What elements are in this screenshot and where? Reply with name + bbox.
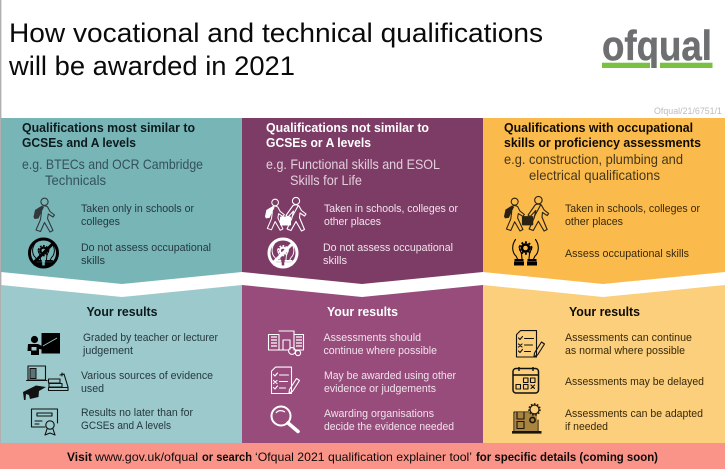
- purple results heading: Your results: [327, 305, 398, 319]
- orange examples: electrical qualifications: [529, 168, 660, 183]
- teal text: where taken: colleges: [81, 216, 120, 228]
- purple heading: GCSEs or A levels: [266, 136, 371, 150]
- purple result: awarding organisations: [324, 408, 454, 433]
- icon: magnifying glass: [272, 406, 298, 432]
- icon: student walking: [34, 198, 54, 232]
- panel: qualifications most similar to GCSEs and A levels: [1, 118, 242, 284]
- title: [8, 18, 543, 81]
- purple text: occupational skills: Do not assess occupational: [323, 242, 453, 254]
- purple result: awarding organisations: Awarding organisations: [324, 408, 434, 420]
- purple result: other evidence: May be awarded using other: [324, 370, 456, 382]
- logo: ofqual: ofqual: [602, 22, 712, 69]
- icon: certificate: [32, 409, 58, 435]
- teal result: results date: GCSEs and A levels: [81, 420, 171, 432]
- teal result: sources of evidence: used: [81, 383, 104, 395]
- purple text: where taken: Taken in schools, colleges or: [324, 203, 458, 215]
- purple text: where taken: [324, 203, 458, 228]
- teal result: results date: [81, 407, 193, 432]
- teal examples: [22, 157, 203, 188]
- purple heading: [266, 121, 429, 150]
- teal text: occupational skills: [81, 242, 211, 267]
- icon: hands holding gear: [513, 240, 538, 266]
- teal text: occupational skills: skills: [81, 255, 105, 267]
- purple result: assessments continue: continue where possible: [324, 345, 437, 357]
- orange heading: skills or proficiency assessments: [504, 136, 701, 150]
- icon: sources of evidence: [23, 366, 68, 400]
- footer text: www.gov.uk/ofqual: [94, 450, 198, 464]
- icon: two people: [265, 197, 306, 231]
- purple result: assessments continue: [324, 332, 437, 357]
- purple upper background: [242, 118, 483, 284]
- icon: college building: [268, 331, 304, 356]
- orange upper background: [483, 118, 725, 284]
- footer text: ‘Ofqual 2021 qualification explainer tool’: [255, 450, 472, 464]
- icon: no occupational skills: [30, 239, 58, 267]
- icon: adapted assessments: [512, 404, 542, 434]
- purple examples: Skills for Life: [290, 173, 362, 188]
- purple result: assessments continue: Assessments should: [324, 332, 421, 344]
- orange results heading: Your results: [569, 305, 640, 319]
- icon: no occupational skills: [269, 239, 297, 267]
- teal result: results date: Results no later than for: [81, 407, 193, 419]
- purple result: other evidence: [324, 370, 456, 395]
- icon: two people: [504, 196, 549, 231]
- purple text: where taken: other places: [324, 216, 381, 228]
- teal lower background: [1, 285, 242, 443]
- icon: checklist: [272, 367, 300, 394]
- panel: qualifications not similar to GCSEs or A levels: [242, 118, 483, 284]
- teal result: teacher judgement: Graded by teacher or lecturer: [83, 332, 218, 344]
- orange text: where taken: Taken in schools, colleges or: [565, 203, 700, 215]
- teal heading: [22, 121, 195, 150]
- orange result: adapted: [565, 408, 703, 433]
- purple lower background: [242, 285, 483, 443]
- panel: teal your results: [1, 285, 242, 443]
- orange text: where taken: other places: [565, 216, 623, 228]
- purple result: awarding organisations: decide the evidence needed: [324, 421, 454, 433]
- reference code: Ofqual/21/6751/1: [654, 106, 722, 117]
- footer text: Visit: [67, 450, 92, 464]
- purple examples: e.g. Functional skills and ESOL: [266, 157, 440, 172]
- orange text: occupational skills: Assess occupational skills: [565, 248, 689, 260]
- icon: checklist: [516, 331, 544, 357]
- footer banner: [0, 443, 725, 469]
- title: How vocational and technical qualifications: [9, 18, 543, 48]
- orange heading: Qualifications with occupational: [504, 121, 693, 135]
- title: will be awarded in 2021: [8, 51, 295, 81]
- teal text: where taken: [81, 203, 194, 228]
- orange result: continue as normal: [565, 332, 692, 357]
- teal heading: GCSEs and A levels: [22, 136, 136, 150]
- purple text: occupational skills: [323, 242, 453, 267]
- orange examples: e.g. construction, plumbing and: [504, 152, 683, 167]
- panel: purple your results: [242, 285, 483, 443]
- orange text: where taken: [565, 203, 700, 228]
- orange examples: [504, 152, 683, 183]
- teal results heading: Your results: [86, 305, 158, 319]
- teal result: sources of evidence: Various sources of evidence: [81, 370, 213, 382]
- teal result: teacher judgement: [82, 332, 218, 357]
- purple heading: Qualifications not similar to: [266, 121, 429, 135]
- orange result: continue as normal: Assessments can continue: [565, 332, 692, 344]
- teal result: teacher judgement: judgement: [82, 345, 133, 357]
- purple text: occupational skills: skills: [323, 255, 347, 267]
- teal heading: Qualifications most similar to: [22, 121, 195, 135]
- orange lower background: [483, 285, 725, 443]
- orange result: adapted: if needed: [565, 421, 608, 433]
- orange heading: [504, 121, 701, 150]
- footer text: [67, 450, 658, 464]
- orange result: may be delayed: Assessments may be delayed: [565, 376, 704, 388]
- purple result: other evidence: evidence or judgements: [324, 383, 436, 395]
- panel: orange your results: [483, 285, 725, 443]
- purple examples: [266, 157, 440, 188]
- footer text: or search: [202, 450, 252, 464]
- icon: calendar: [513, 367, 538, 393]
- panel: qualifications with occupational skills: [483, 118, 725, 284]
- teal examples: Technicals: [45, 173, 106, 188]
- teal text: occupational skills: Do not assess occupational: [81, 242, 211, 254]
- teal result: sources of evidence: [81, 370, 213, 395]
- icon: teacher at board: [28, 333, 60, 355]
- orange result: continue as normal: as normal where possible: [565, 345, 685, 357]
- orange result: adapted: Assessments can be adapted: [565, 408, 703, 420]
- teal examples: e.g. BTECs and OCR Cambridge: [22, 157, 203, 172]
- footer text: for specific details (coming soon): [476, 450, 658, 464]
- teal text: where taken: Taken only in schools or: [81, 203, 194, 215]
- teal upper background: [1, 118, 242, 284]
